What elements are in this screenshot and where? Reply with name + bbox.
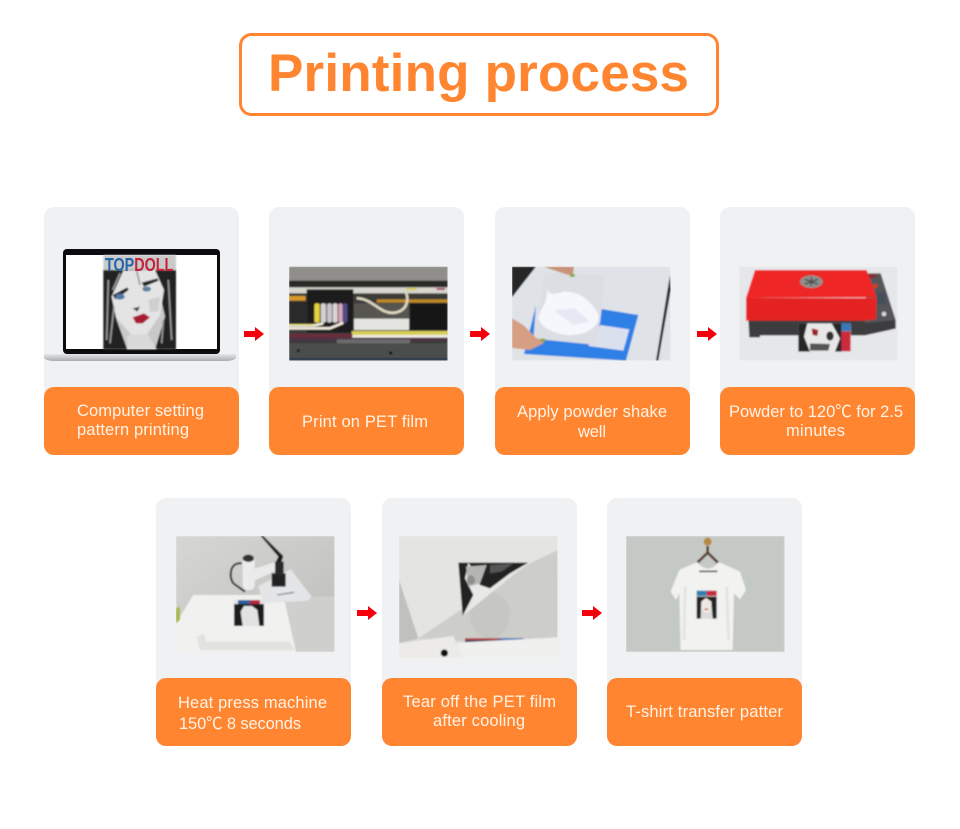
icon: laptop showing portrait design: TOPDOLL bbox=[105, 254, 173, 275]
orange label: step 5 bbox=[156, 678, 351, 746]
orange label: step 3 bbox=[495, 387, 690, 455]
orange label: step 6: after cooling bbox=[433, 712, 525, 730]
arrow: step 2 to 3 bbox=[470, 327, 490, 341]
arrow: step 5 to 6 bbox=[357, 606, 377, 620]
panel: step 2 print on PET film bbox=[269, 207, 464, 455]
photo: powder shaken over tray bbox=[512, 267, 671, 361]
arrow: step 6 to 7 bbox=[582, 606, 602, 620]
orange label: step 2: Print on PET film bbox=[302, 413, 428, 431]
arrow: step 1 to 2 bbox=[244, 327, 264, 341]
photo: PET film peeled from shirt bbox=[399, 536, 558, 658]
photo: red curing oven bbox=[739, 267, 898, 361]
orange label: step 1: pattern printing bbox=[77, 421, 189, 439]
arrow: step 3 to 4 bbox=[697, 327, 717, 341]
panel: step 6 tear off film bbox=[382, 498, 577, 746]
panel: step 5 heat press bbox=[156, 498, 351, 746]
panel: step 1 computer setting bbox=[44, 207, 239, 455]
orange label: step 2 bbox=[269, 387, 464, 455]
orange label: step 7: T-shirt transfer patter bbox=[626, 703, 784, 721]
panel: step 4 powder curing bbox=[720, 207, 915, 455]
orange label: step 3: Apply powder shake bbox=[517, 403, 667, 421]
orange label: step 1: Computer setting bbox=[77, 402, 204, 420]
orange label: step 4: Powder to 120℃ for 2.5 bbox=[729, 403, 903, 421]
icon: laptop showing portrait design bbox=[44, 249, 236, 361]
orange label: step 1 bbox=[44, 387, 239, 455]
orange label: step 6: Tear off the PET film bbox=[403, 693, 556, 711]
title: Printing process bbox=[268, 44, 689, 103]
photo: heat press machine over t-shirt bbox=[176, 536, 335, 652]
orange label: step 7 bbox=[607, 678, 802, 746]
orange label: step 5: 150℃ 8 seconds bbox=[179, 715, 301, 733]
photo: finished printed t-shirt on hanger bbox=[626, 536, 785, 652]
orange label: step 5: Heat press machine bbox=[178, 694, 327, 712]
photo: printer print head bbox=[289, 267, 448, 361]
orange label: step 4: minutes bbox=[786, 422, 845, 440]
panel: step 7 finished t-shirt bbox=[607, 498, 802, 746]
orange label: step 3: well bbox=[577, 423, 606, 441]
orange label: step 6 bbox=[382, 678, 577, 746]
orange label: step 4 bbox=[720, 387, 915, 455]
panel: step 3 apply powder bbox=[495, 207, 690, 455]
title bbox=[240, 34, 718, 114]
